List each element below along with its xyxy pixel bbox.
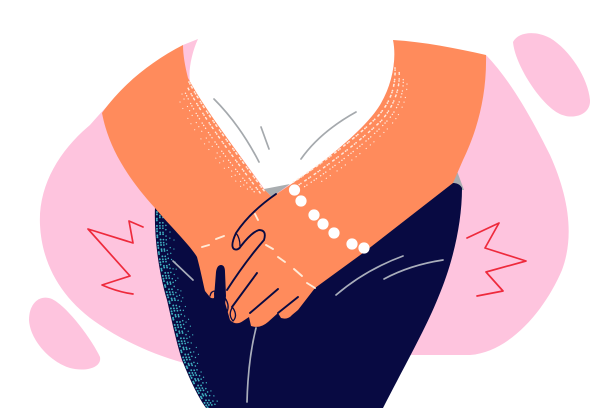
shirt [189,39,394,190]
belt: grey waistband [448,171,464,190]
shirt shadow: grey wedge [264,184,290,197]
pink blob: top right [513,33,590,117]
grain: white speckle on left arm [180,82,265,195]
trouser crease lines [173,256,443,402]
pink background blob: main [40,39,569,380]
trouser grain: teal speckle [157,212,219,408]
pearl bracelet [289,184,370,254]
finger outlines [210,194,298,321]
arms and hands [102,40,486,327]
trousers [155,183,462,408]
pain mark: left zigzag [88,221,143,294]
pink blob: bottom left [29,298,100,370]
navy gap between fingers [214,265,229,325]
grain: white speckle on right arm [292,68,407,187]
shirt wrinkle lines [214,99,356,162]
pain mark: right zigzag [467,223,526,296]
wrist dashed lines: cream [202,214,315,288]
